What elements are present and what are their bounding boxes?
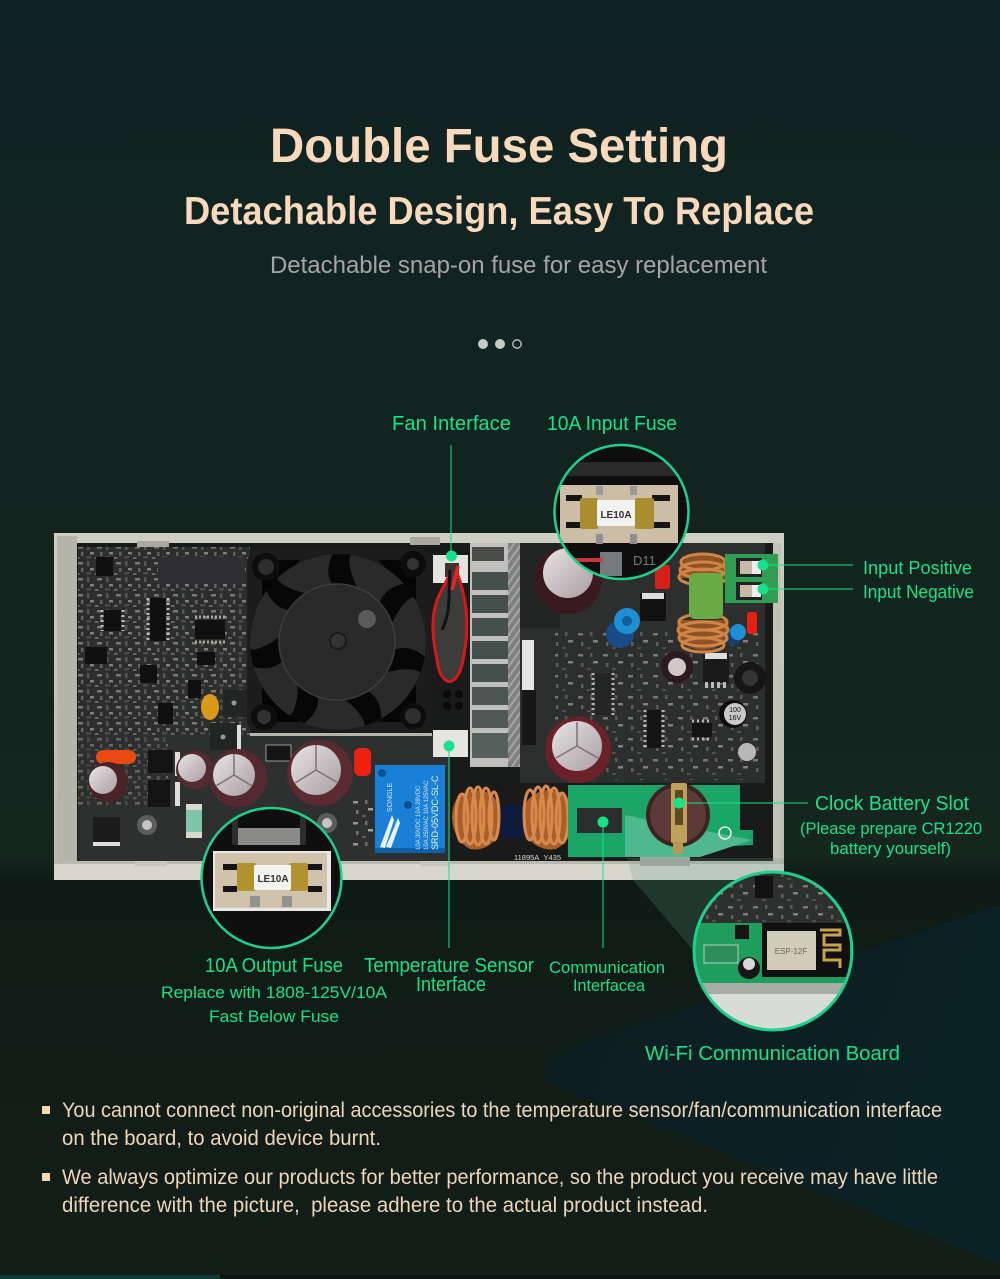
- label: Wi-Fi communication board: Wi-Fi Communication Board: [645, 1043, 900, 1065]
- cooling fan: [247, 551, 432, 736]
- label: communication interface: Communication: [549, 958, 665, 977]
- heatsink: [470, 543, 520, 767]
- label: clock battery slot: battery yourself): [830, 839, 951, 858]
- label: temperature sensor interface: Temperature Sensor: [364, 955, 534, 977]
- communication board with battery slot: [568, 783, 753, 857]
- note: non-original accessories: You cannot connect non-original accessories to the temperature sensor/fan/communication interface: [62, 1099, 942, 1122]
- detail circle: Wi-Fi communication board: ESP-12F: [775, 947, 807, 956]
- relay: 10A 250VAC 10A 125VAC: [424, 780, 430, 850]
- circuit board photo in enclosure: [54, 533, 800, 950]
- capacitors: [88, 740, 371, 807]
- note: product optimisation: We always optimize our products for better performance, so the product you receive may have little: [62, 1166, 938, 1189]
- label: 10A output fuse: Fast Below Fuse: [209, 1007, 339, 1026]
- relay: SRD-05VDC-SL-C: [430, 775, 440, 850]
- label: fan interface: Fan Interface: [392, 413, 511, 435]
- note: product optimisation: [42, 1166, 938, 1217]
- tagline: Detachable snap-on fuse for easy replacement: [270, 252, 767, 279]
- right power board: [520, 543, 766, 783]
- leader lines and anchor dots: [444, 445, 853, 948]
- subtitle: Detachable Design, Easy To Replace: [184, 190, 814, 233]
- relay: [375, 765, 445, 853]
- temperature sensor connector: [433, 730, 468, 757]
- pagination dots: [478, 339, 521, 349]
- label: 10A output fuse: 10A Output Fuse: [205, 955, 343, 977]
- label: temperature sensor interface: Interface: [416, 974, 486, 996]
- label: input negative: Input Negative: [863, 582, 974, 602]
- label: clock battery slot: (Please prepare CR1220: [800, 819, 982, 838]
- relay: 10A 30VDC 10A 28VDC: [416, 785, 422, 850]
- note: non-original accessories: [42, 1099, 942, 1150]
- translucent beam toward Wi-Fi detail: [627, 858, 800, 950]
- label: clock battery slot: Clock Battery Slot: [815, 793, 969, 815]
- label: temperature sensor interface: [364, 955, 534, 996]
- copper toroid inductor: 11895A_Y435: [514, 853, 561, 862]
- note: product optimisation: difference with the picture, please adhere to the actual product instead.: [62, 1194, 708, 1217]
- right power board: 16V: [729, 715, 742, 722]
- detail circle: input fuse: D11: [633, 553, 656, 568]
- detail circle: input fuse: [553, 444, 690, 580]
- label: 10A output fuse: [161, 955, 388, 1026]
- enclosure frame: [54, 533, 784, 880]
- label: communication interface: [549, 958, 665, 995]
- copper toroid inductor: [452, 785, 574, 862]
- title: Double Fuse Setting: [270, 120, 728, 173]
- fan connector and wires: [433, 555, 468, 710]
- right power board: 100: [729, 707, 741, 714]
- detail circle: output fuse: LE10A: [257, 874, 289, 885]
- label: input positive: Input Positive: [863, 558, 972, 578]
- left control board: [78, 547, 450, 861]
- label: 10A input fuse: 10A Input Fuse: [547, 413, 677, 435]
- label: clock battery slot: [800, 793, 982, 858]
- detail circle: input fuse: LE10A: [600, 510, 632, 521]
- detail circle: Wi-Fi communication board: [690, 870, 855, 1036]
- detail circle: output fuse: [200, 806, 343, 950]
- input terminal block: [725, 554, 778, 603]
- relay: SONGLE: [387, 782, 394, 812]
- label: 10A output fuse: Replace with 1808-125V/10A: [161, 983, 388, 1002]
- label: communication interface: Interfacea: [573, 976, 646, 995]
- note: non-original accessories: on the board, to avoid device burnt.: [62, 1127, 381, 1150]
